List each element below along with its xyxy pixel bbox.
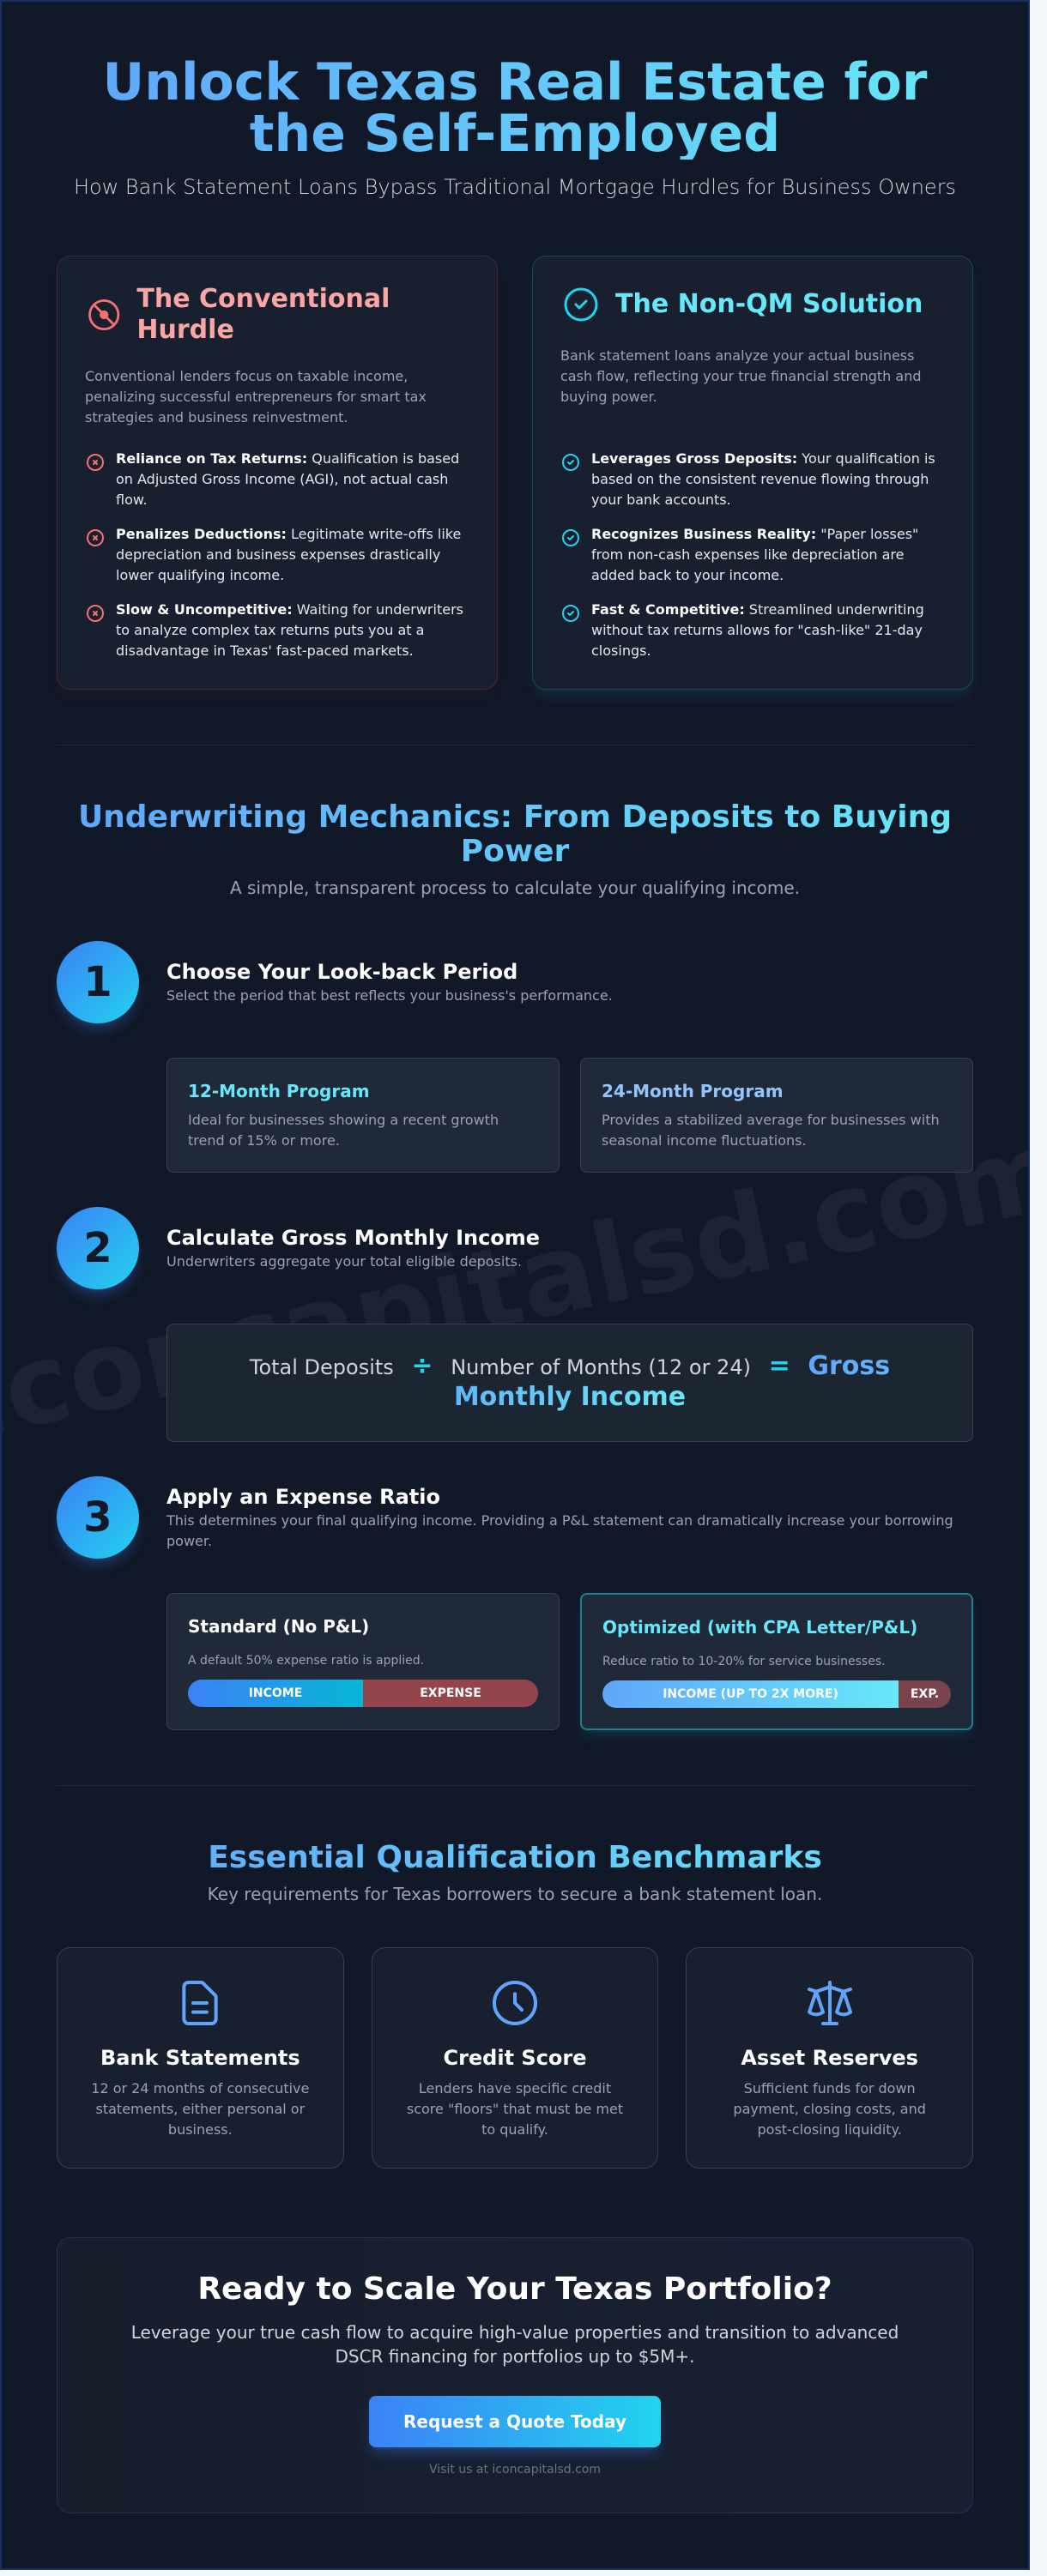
step 1 text (166, 960, 613, 1004)
hurdle item (87, 601, 463, 659)
step 1 options (166, 1058, 973, 1173)
cta text: DSCR financing for portfolios up to $5M+. (335, 2346, 695, 2367)
hurdle item (87, 526, 461, 583)
card title: Asset Reserves (741, 2046, 918, 2070)
step 3 text (166, 1485, 953, 1549)
step number 2: 2 (83, 1224, 112, 1272)
income segment (188, 1680, 363, 1707)
icon: check circle (562, 529, 579, 546)
card title: Standard (No P&L) (188, 1616, 369, 1637)
section heading: underwriting mechanics (78, 799, 952, 898)
subheading: Key requirements for Texas borrowers to secure a bank statement loan. (208, 1884, 822, 1904)
card: bank statements (57, 1947, 344, 2169)
card text: Ideal for businesses showing a recent growth trend of 15% or more. (188, 1112, 499, 1149)
expense segment (363, 1680, 538, 1707)
card text: 12 or 24 months of consecutive statements, either personal or business. (91, 2080, 309, 2138)
benefit item (562, 601, 924, 659)
expense segment: EXP. (911, 1687, 939, 1701)
card title: 24-Month Program (602, 1081, 784, 1101)
hurdle item (87, 450, 459, 508)
formula box: Total Deposits ÷ Number of Months (12 or 24) = Gross Monthly Income (250, 1351, 890, 1412)
step 2 header (53, 1207, 540, 1301)
step 3 options (166, 1593, 973, 1738)
list of benefits (562, 450, 935, 659)
cta button (369, 2396, 661, 2447)
step number 3 (57, 1476, 139, 1559)
section heading: benchmarks (208, 1840, 822, 1904)
card title: Bank Statements (100, 2046, 300, 2070)
panel: the conventional hurdle (57, 256, 498, 690)
item text: Slow & Uncompetitive: Waiting for underwriters to analyze complex tax returns puts you at a disadvantage in Texas' fast-paced markets. (116, 601, 463, 659)
call to action panel (57, 2237, 973, 2513)
card text: A default 50% expense ratio is applied. (188, 1654, 424, 1668)
formula box (166, 1324, 973, 1442)
panel heading: non-qm (565, 288, 923, 321)
card: credit score (372, 1947, 658, 2169)
icon: prohibited (88, 299, 120, 330)
item text: Fast & Competitive: Streamlined underwriting without tax returns allows for "cash-like" 21-day closings. (591, 601, 924, 659)
card: 12-month program (166, 1058, 560, 1173)
icon: check circle (562, 454, 579, 471)
step 3 description: This determines your final qualifying income. Providing a P&L statement can dramatically increase your borrowing power. (166, 1512, 953, 1549)
income segment (602, 1680, 899, 1708)
step number 1: 1 (83, 958, 112, 1006)
panel: the non-qm solution (532, 256, 973, 690)
card text: Reduce ratio to 10-20% for service businesses. (602, 1655, 886, 1668)
card: 24-month program (580, 1058, 973, 1173)
comparison panels (57, 256, 973, 697)
step 2 title: Calculate Gross Monthly Income (166, 1226, 540, 1250)
step number 2 (57, 1207, 139, 1289)
benefit item (562, 526, 918, 583)
list of hurdles (87, 450, 463, 659)
benefit item (562, 450, 935, 508)
income segment: INCOME (UP TO 2X MORE) (663, 1687, 838, 1701)
step 2 description: Underwriters aggregate your total eligible deposits. (166, 1253, 522, 1270)
card: optimized (580, 1593, 973, 1730)
card title: Credit Score (443, 2046, 587, 2070)
icon: scale (802, 1976, 857, 2030)
subtitle: How Bank Statement Loans Bypass Traditional Mortgage Hurdles for Business Owners (74, 175, 956, 199)
item text: Reliance on Tax Returns: Qualification is based on Adjusted Gross Income (AGI), not actual cash flow. (116, 450, 459, 508)
card title: 12-Month Program (188, 1081, 370, 1101)
step 1 description: Select the period that best reflects your business's performance. (166, 987, 613, 1004)
icon: check circle (562, 605, 579, 622)
website note: Visit us at iconcapitalsd.com (429, 2463, 601, 2476)
icon: x circle (87, 454, 104, 471)
heading: The Conventional Hurdle (136, 284, 390, 345)
item text: Leverages Gross Deposits: Your qualification is based on the consistent revenue flowing through your bank accounts. (591, 450, 935, 508)
cta heading: Ready to Scale Your Texas Portfolio? (197, 2271, 832, 2307)
step 1 title: Choose Your Look-back Period (166, 960, 517, 984)
cta text: Leverage your true cash flow to acquire high-value properties and transition to advanced (131, 2322, 899, 2343)
expense segment: EXPENSE (420, 1686, 481, 1700)
cta button: Request a Quote Today (403, 2411, 626, 2432)
title: Unlock Texas Real Estate for the Self-Employed (103, 52, 927, 164)
benchmark cards (57, 1947, 973, 2169)
expense segment (899, 1680, 951, 1708)
intro text: Conventional lenders focus on taxable income, penalizing successful entrepreneurs for smart tax strategies and business reinvestment. (85, 368, 427, 425)
card: asset reserves (686, 1947, 973, 2169)
card: standard (166, 1593, 560, 1730)
intro text: Bank statement loans analyze your actual business cash flow, reflecting your true financial strength and buying power. (560, 347, 921, 405)
heading (57, 1841, 973, 1875)
cta text (92, 2320, 938, 2368)
heading: Essential Qualification Benchmarks (208, 1840, 822, 1875)
item text: Penalizes Deductions: Legitimate write-offs like depreciation and business expenses drastically lower qualifying income. (116, 526, 461, 583)
step 2 text (166, 1226, 540, 1270)
card title: Optimized (with CPA Letter/P&L) (602, 1617, 917, 1638)
icon: x circle (87, 529, 104, 546)
income segment: INCOME (249, 1686, 302, 1700)
subheading: A simple, transparent process to calculate your qualifying income. (230, 878, 800, 898)
icon: check circle (565, 288, 597, 321)
panel heading: conventional (88, 284, 390, 345)
icon: x circle (87, 605, 104, 622)
icon: document (182, 1981, 218, 2025)
card text: Provides a stabilized average for businesses with seasonal income fluctuations. (602, 1112, 940, 1149)
step 1 header (53, 941, 613, 1035)
bar chart: optimized split (602, 1680, 951, 1708)
step 3 title: Apply an Expense Ratio (166, 1485, 440, 1509)
step 3 header (53, 1476, 953, 1571)
item text: Recognizes Business Reality: "Paper losses" from non-cash expenses like depreciation are added back to your income. (591, 526, 918, 583)
card text: Sufficient funds for down payment, closing costs, and post-closing liquidity. (733, 2080, 926, 2138)
card text: Lenders have specific credit score "floors" that must be met to qualify. (407, 2080, 623, 2138)
step number 3: 3 (83, 1493, 112, 1541)
header (74, 52, 956, 199)
step number 1 (57, 941, 139, 1023)
bar chart: standard split (188, 1680, 538, 1707)
heading: Underwriting Mechanics: From Deposits to Buying Power (78, 799, 952, 869)
icon: clock (487, 1976, 542, 2030)
heading: The Non-QM Solution (615, 289, 923, 319)
